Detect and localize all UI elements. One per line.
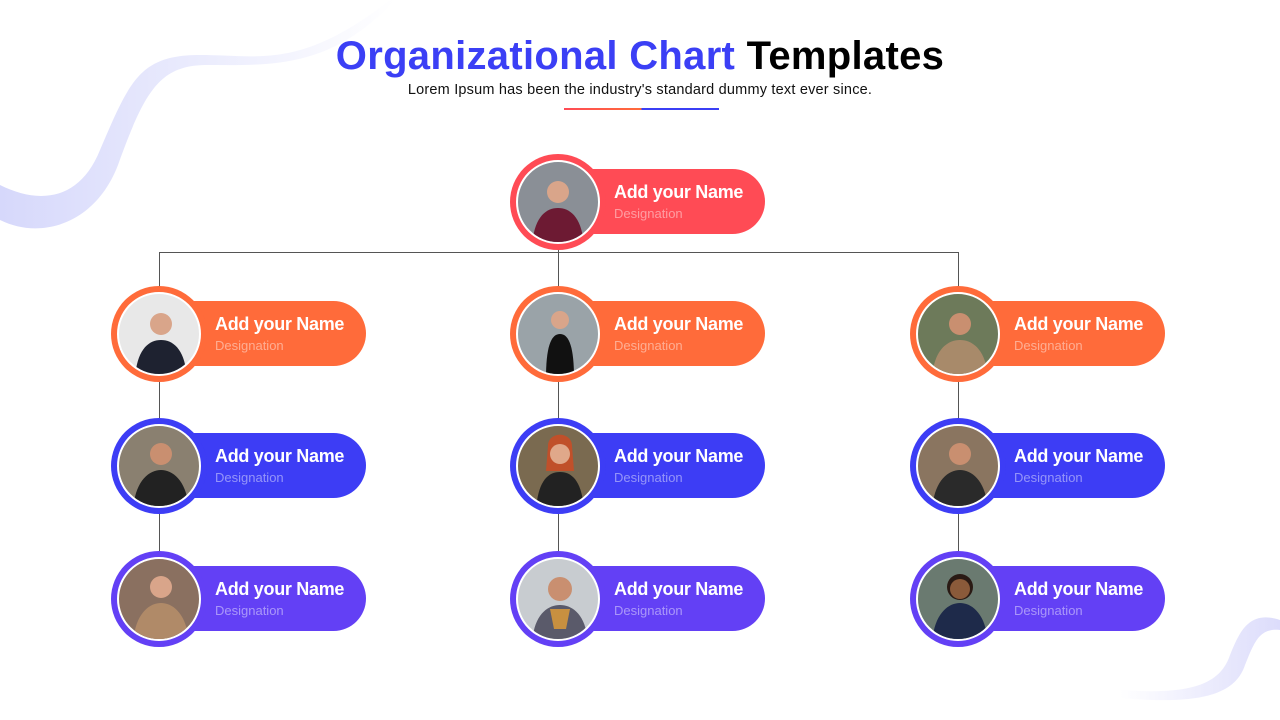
card: row2 center: Add your Name	[614, 446, 743, 466]
card: row1 right	[910, 286, 1165, 382]
card: row2 left: Add your Name	[215, 446, 344, 466]
title: Organizational Chart Templates	[336, 34, 944, 78]
card: top: Add your Name	[614, 182, 743, 202]
card: row3 center: Designation	[614, 603, 683, 618]
card: row1 left: Add your Name	[215, 314, 344, 334]
card: row1 center: Add your Name	[614, 314, 743, 334]
card: row2 right: Add your Name	[1014, 446, 1143, 466]
card: row1 right: Add your Name	[1014, 314, 1143, 334]
card: row3 right: Designation	[1014, 603, 1083, 618]
decorative wave bottom-right	[1157, 618, 1280, 700]
card: row1 center	[510, 286, 765, 382]
card: row3 center: Add your Name	[614, 579, 743, 599]
card: row3 left: Add your Name	[215, 579, 344, 599]
card: row2 center	[510, 418, 765, 514]
card: row1 right: Designation	[1014, 338, 1083, 353]
card: row2 right	[910, 418, 1165, 514]
decorative wave top-left	[0, 45, 316, 228]
card: row2 left: Designation	[215, 470, 284, 485]
card: row1 left: Designation	[215, 338, 284, 353]
card: row2 center: Designation	[614, 470, 683, 485]
card: row3 left	[111, 551, 366, 647]
card: top	[510, 154, 765, 250]
card: row1 center: Designation	[614, 338, 683, 353]
card: row2 right: Designation	[1014, 470, 1083, 485]
card: row3 right	[910, 551, 1165, 647]
card: row1 left	[111, 286, 366, 382]
underline accent	[564, 108, 719, 110]
card: row3 left: Designation	[215, 603, 284, 618]
subtitle: Lorem Ipsum has been the industry's standard dummy text ever since.	[408, 82, 872, 98]
card: row3 center	[510, 551, 765, 647]
card: row2 left	[111, 418, 366, 514]
card: row3 right: Add your Name	[1014, 579, 1143, 599]
card: top: Designation	[614, 206, 683, 221]
